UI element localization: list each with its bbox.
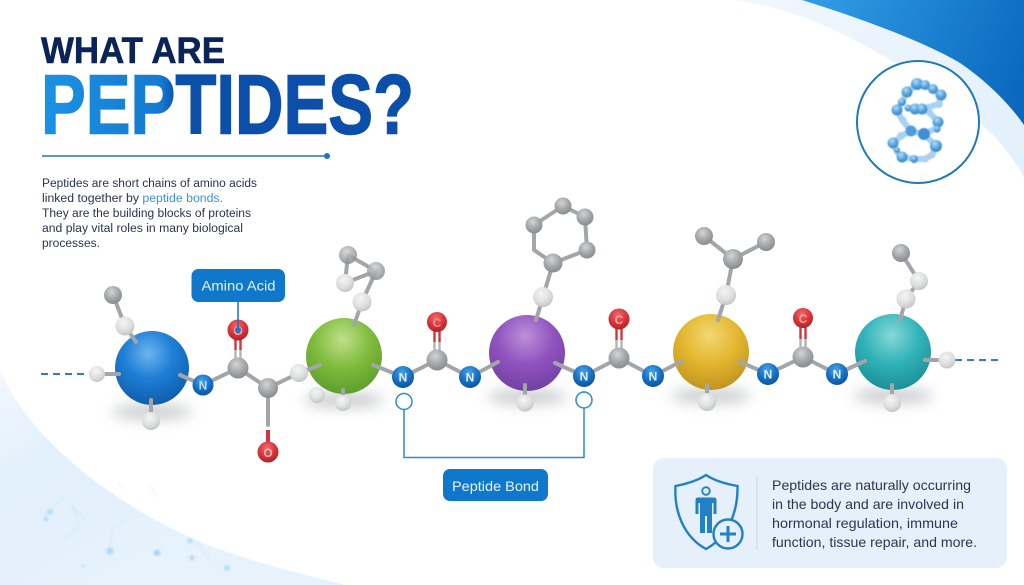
bracket xyxy=(404,408,584,458)
panel text: in the body and are involved in xyxy=(772,496,964,512)
dashed chain ends xyxy=(41,360,1003,374)
background: bottom-left light swoosh xyxy=(0,370,345,585)
callout: peptide bond xyxy=(396,392,592,501)
background: faint molecular network xyxy=(44,482,230,571)
title xyxy=(41,29,414,152)
sphere shadows xyxy=(112,389,933,419)
nitrogen atoms: N xyxy=(833,368,841,382)
icon: shield with person and plus xyxy=(675,475,742,549)
callout: amino acid: Amino Acid xyxy=(202,278,276,294)
intro text: linked together by peptide bonds. xyxy=(42,193,223,205)
callout: peptide bond: Peptide Bond xyxy=(452,478,539,494)
nitrogen atoms xyxy=(192,363,848,396)
nitrogen atoms: N xyxy=(466,370,474,384)
panel text: function, tissue repair, and more. xyxy=(772,534,977,550)
nitrogen atoms: N xyxy=(399,370,407,384)
grey atoms xyxy=(104,198,910,398)
nitrogen atoms: N xyxy=(199,378,207,392)
red atoms xyxy=(228,308,813,462)
intro text: and play vital roles in many biological xyxy=(42,223,243,235)
white atoms xyxy=(89,272,956,430)
background: top-right light band xyxy=(735,0,1024,177)
intro text: processes. xyxy=(42,238,100,250)
panel text xyxy=(772,477,977,550)
icon: helix in circle xyxy=(857,61,979,183)
title line: peptides: PEPTIDES? xyxy=(41,58,414,152)
intro text: Peptides are short chains of amino acids xyxy=(42,178,257,190)
panel: natural role xyxy=(653,458,1007,568)
title underline xyxy=(42,153,330,159)
background: top-right blue swoosh xyxy=(802,0,1024,125)
panel text: Peptides are naturally occurring xyxy=(772,477,971,493)
nitrogen atoms: N xyxy=(649,370,657,384)
intro text: They are the building blocks of proteins xyxy=(42,208,251,220)
label xyxy=(443,469,548,501)
red atoms: C xyxy=(799,312,808,326)
title line: what are: WHAT ARE xyxy=(41,29,225,71)
red atoms: C xyxy=(615,313,624,327)
amino acid spheres xyxy=(115,314,931,405)
bonds xyxy=(97,206,947,425)
red atoms: O xyxy=(263,446,273,460)
double bonds to oxygen xyxy=(236,323,806,445)
red atoms: C xyxy=(433,316,442,330)
callout: amino acid xyxy=(192,269,285,333)
panel text: hormonal regulation, immune xyxy=(772,515,958,531)
peptide chain xyxy=(41,198,1003,462)
nitrogen atoms: N xyxy=(580,370,588,384)
red atoms: O xyxy=(233,324,243,338)
intro text xyxy=(42,178,257,250)
nitrogen atoms: N xyxy=(764,368,772,382)
